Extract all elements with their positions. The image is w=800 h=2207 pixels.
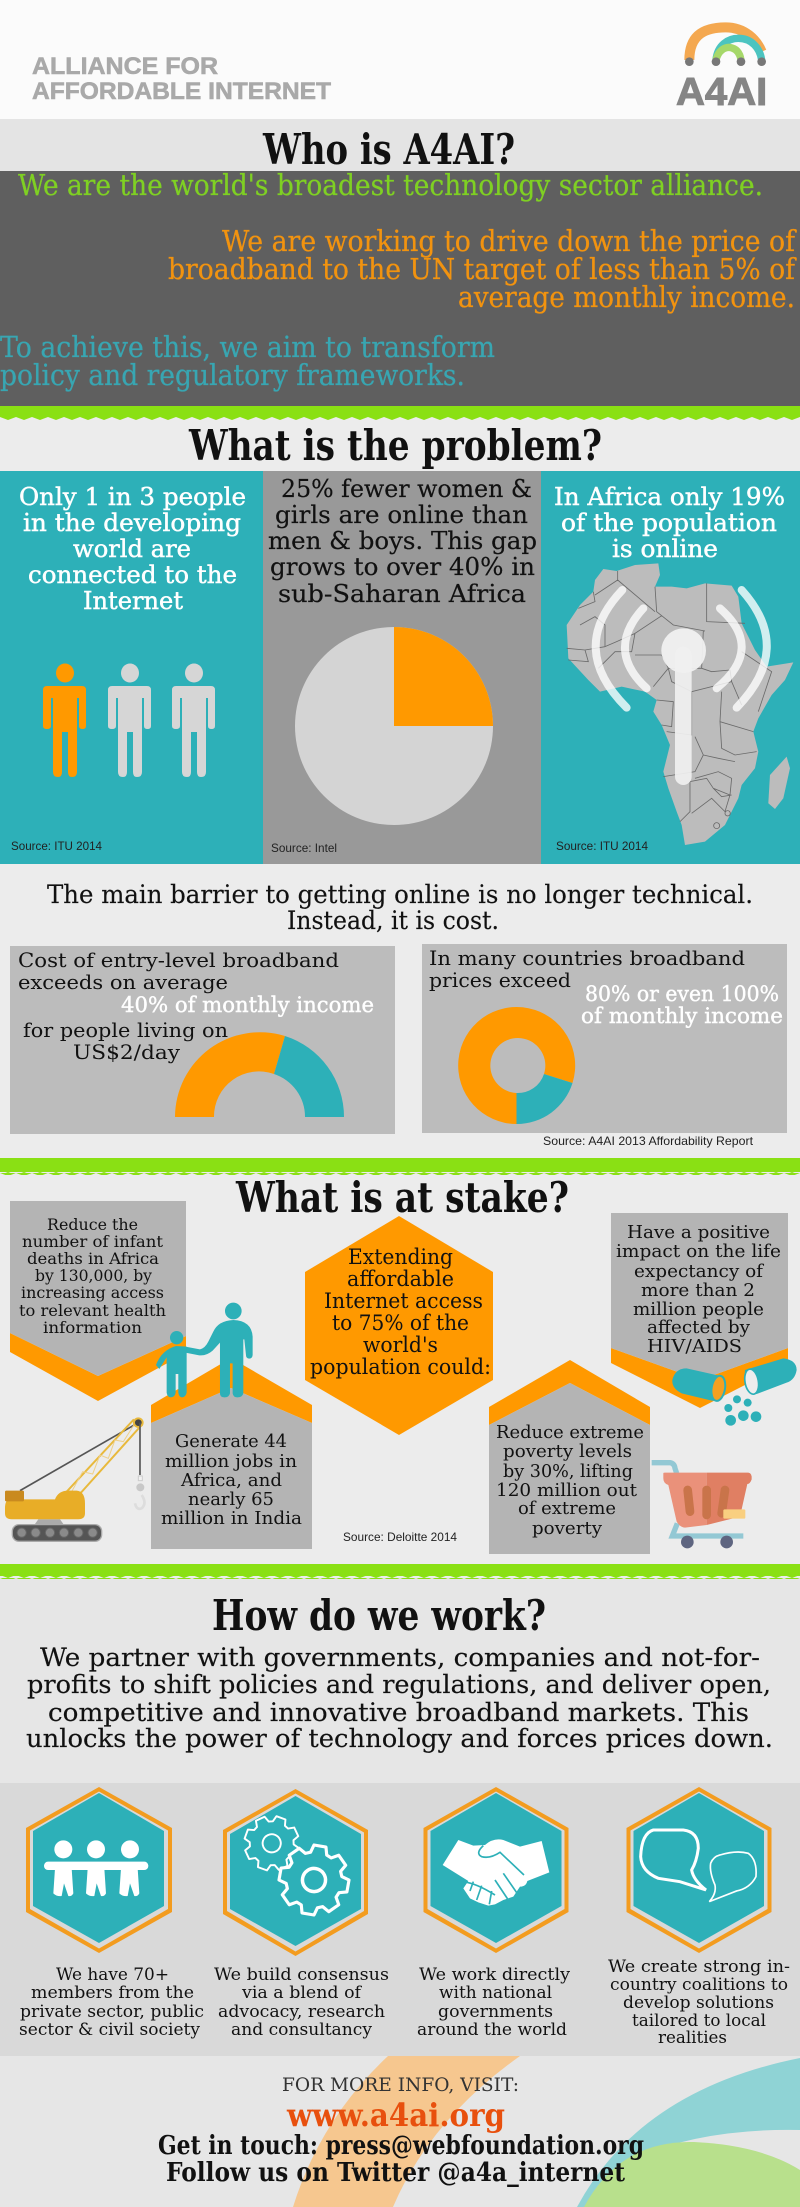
text: coalitions: country coalitions to bbox=[610, 1975, 788, 1995]
source: Source: Intel bbox=[271, 841, 337, 855]
icon: gears bbox=[237, 1809, 354, 1920]
text: members: We have 70+ bbox=[56, 1965, 169, 1985]
hexagon text: Internet access bbox=[324, 1289, 483, 1313]
panel text: connected to the bbox=[28, 561, 237, 589]
contact: Get in touch: press@webfoundation.org bbox=[158, 2131, 644, 2161]
text: governments: with national bbox=[439, 1983, 552, 2003]
text: coalitions: tailored to local bbox=[632, 2011, 766, 2031]
panel text: In many countries broadband bbox=[429, 946, 745, 970]
highlight figure bbox=[581, 982, 783, 1028]
logo bbox=[676, 27, 767, 114]
icon: pill capsule bbox=[672, 1358, 797, 1426]
organisation name: AFFORDABLE INTERNET bbox=[32, 78, 331, 105]
hexagon: governments bbox=[424, 1787, 568, 1953]
callout text: more than 2 bbox=[641, 1280, 755, 1301]
panel: Africa online bbox=[541, 471, 800, 864]
panel text: Internet bbox=[83, 587, 183, 615]
green divider bbox=[0, 1158, 800, 1175]
hexagon text: population could: bbox=[310, 1355, 491, 1379]
section background bbox=[0, 1579, 800, 1783]
callout text: of extreme bbox=[518, 1498, 616, 1519]
callout text: increasing access bbox=[21, 1283, 164, 1302]
text: governments: governments bbox=[438, 2002, 553, 2022]
teal statement: policy and regulatory frameworks. bbox=[0, 358, 465, 392]
callout text: information bbox=[43, 1318, 142, 1337]
text: consensus: We build consensus bbox=[214, 1965, 389, 1985]
organisation name: ALLIANCE FOR bbox=[32, 53, 218, 80]
panel text: sub-Saharan Africa bbox=[278, 580, 526, 608]
heading: Who is A4AI? bbox=[262, 125, 515, 174]
intro paragraph: unlocks the power of technology and forces prices down. bbox=[26, 1724, 773, 1753]
panel text: world are bbox=[73, 535, 191, 563]
callout text bbox=[19, 1215, 166, 1337]
hexagon: consensus bbox=[223, 1789, 368, 1956]
icon: adult and child bbox=[156, 1303, 253, 1397]
panel text bbox=[18, 948, 339, 1064]
hexagon: central statement bbox=[305, 1216, 493, 1435]
panel text: girls are online than bbox=[275, 501, 528, 529]
orange statement bbox=[168, 224, 797, 314]
panel text bbox=[19, 483, 246, 615]
callout text: Reduce extreme bbox=[496, 1422, 644, 1443]
intro paragraph: We partner with governments, companies and not-for- bbox=[40, 1643, 760, 1672]
callout text: by 30%, lifting bbox=[503, 1461, 633, 1482]
footer bbox=[0, 2056, 800, 2207]
callout text: Africa, and bbox=[180, 1470, 282, 1491]
callout text: deaths in Africa bbox=[27, 1249, 159, 1268]
barrier statement: Instead, it is cost. bbox=[287, 906, 499, 935]
icon: orange person bbox=[43, 664, 86, 777]
text: members: sector & civil society bbox=[19, 2020, 200, 2040]
callout: poverty bbox=[489, 1360, 650, 1554]
intro paragraph: profits to shift policies and regulations, and deliver open, bbox=[27, 1670, 771, 1699]
half donut chart bbox=[175, 1032, 344, 1117]
intro paragraph bbox=[26, 1643, 773, 1753]
callout text: to relevant health bbox=[19, 1301, 166, 1320]
panel text: prices exceed bbox=[429, 968, 571, 992]
icon: three people bbox=[44, 1840, 148, 1896]
callout text: affected by bbox=[647, 1317, 751, 1338]
callout text: poverty bbox=[532, 1518, 603, 1539]
callout text: Have a positive bbox=[627, 1222, 770, 1243]
text: governments bbox=[417, 1965, 570, 2040]
panel text: 25% fewer women & bbox=[281, 475, 532, 503]
callout text: impact on the life bbox=[616, 1241, 781, 1262]
callout: infant deaths bbox=[10, 1201, 186, 1401]
callout text: poverty levels bbox=[503, 1441, 632, 1462]
panel text: US$2/day bbox=[73, 1040, 181, 1064]
text: consensus: and consultancy bbox=[231, 2020, 372, 2040]
icon: handshake bbox=[443, 1839, 549, 1906]
callout text: Reduce the bbox=[47, 1215, 138, 1234]
donut chart bbox=[458, 1007, 575, 1124]
text: members: private sector, public bbox=[20, 2002, 204, 2022]
barrier statement: The main barrier to getting online is no longer technical. bbox=[47, 880, 753, 909]
callout text: expectancy of bbox=[634, 1261, 764, 1282]
header bbox=[0, 0, 800, 119]
panel text: for people living on bbox=[23, 1018, 228, 1042]
text: consensus: via a blend of bbox=[241, 1983, 363, 2003]
text: members bbox=[19, 1965, 204, 2040]
dark panel bbox=[0, 171, 800, 406]
text: coalitions: realities bbox=[658, 2028, 727, 2048]
callout text: million people bbox=[633, 1299, 764, 1320]
source: Source: Deloitte 2014 bbox=[343, 1530, 457, 1544]
hexagon text: to 75% of the bbox=[332, 1311, 469, 1335]
teal statement bbox=[0, 330, 495, 392]
highlight figure: 40% of monthly income bbox=[121, 993, 374, 1017]
section: who is A4AI bbox=[0, 119, 800, 406]
panel: cost for people on US$2/day bbox=[10, 946, 395, 1134]
intro paragraph: competitive and innovative broadband markets. This bbox=[48, 1698, 749, 1727]
barrier statement bbox=[47, 880, 753, 935]
panel text: is online bbox=[612, 535, 718, 563]
text: governments: We work directly bbox=[419, 1965, 570, 1985]
icon: speech bubbles bbox=[641, 1830, 756, 1902]
callout text bbox=[161, 1431, 302, 1529]
highlight figure: 80% or even 100% bbox=[585, 982, 779, 1006]
hexagon text: affordable bbox=[347, 1267, 454, 1291]
icon: grey person bbox=[108, 664, 151, 777]
heading: how do we work: How do we work? bbox=[212, 1591, 546, 1640]
callout: jobs bbox=[151, 1358, 312, 1549]
heading: what is the problem: What is the problem? bbox=[188, 421, 602, 470]
hexagon text: Extending bbox=[348, 1245, 453, 1269]
organisation name bbox=[32, 53, 331, 105]
icon: signal tower bbox=[596, 590, 767, 777]
panel: gender gap bbox=[263, 471, 541, 864]
text: governments: around the world bbox=[417, 2020, 567, 2040]
text: coalitions: We create strong in- bbox=[608, 1957, 790, 1977]
panel text: of the population bbox=[561, 509, 777, 537]
icon: grey person bbox=[172, 664, 215, 777]
callout text bbox=[496, 1422, 644, 1539]
callout text: million in India bbox=[161, 1508, 302, 1529]
text: coalitions bbox=[608, 1957, 790, 2048]
panel: connected people bbox=[0, 471, 263, 864]
teal statement: To achieve this, we aim to transform bbox=[0, 330, 495, 364]
panel text bbox=[429, 946, 745, 992]
hexagon: members bbox=[26, 1787, 172, 1953]
source: Source: ITU 2014 bbox=[11, 839, 102, 853]
callout text: HIV/AIDS bbox=[647, 1336, 742, 1357]
panel text: Only 1 in 3 people bbox=[19, 483, 246, 511]
icon: Africa map bbox=[567, 563, 793, 845]
source: Source: A4AI 2013 Affordability Report bbox=[543, 1134, 754, 1148]
text: coalitions: develop solutions bbox=[623, 1993, 774, 2013]
panel text: men & boys. This gap bbox=[268, 527, 537, 555]
hexagon text bbox=[310, 1245, 491, 1379]
callout text: nearly 65 bbox=[188, 1489, 274, 1510]
panel text: In Africa only 19% bbox=[554, 483, 785, 511]
website: www.a4ai.org bbox=[286, 2096, 505, 2134]
panel text bbox=[554, 483, 785, 563]
callout text: million jobs in bbox=[165, 1451, 297, 1472]
text: consensus: advocacy, research bbox=[218, 2002, 385, 2022]
logo: A4AI bbox=[676, 71, 767, 114]
decorative logo arcs bbox=[293, 2056, 800, 2207]
green divider bbox=[0, 406, 800, 420]
source: Source: ITU 2014 bbox=[556, 839, 648, 853]
icon: shopping cart bbox=[652, 1463, 752, 1548]
pie chart bbox=[295, 627, 493, 825]
panel: prices in many countries bbox=[422, 944, 787, 1133]
callout: life expectancy bbox=[611, 1213, 788, 1408]
hexagon: coalitions bbox=[626, 1787, 772, 1953]
callout text: by 130,000, by bbox=[35, 1266, 152, 1285]
panel text bbox=[268, 475, 537, 608]
callout text: Generate 44 bbox=[175, 1431, 287, 1452]
heading: what is at stake: What is at stake? bbox=[235, 1173, 569, 1222]
panel text: exceeds on average bbox=[18, 970, 228, 994]
callout text bbox=[616, 1222, 781, 1357]
text: consensus bbox=[214, 1965, 389, 2040]
band background bbox=[0, 1783, 800, 2056]
panel text: grows to over 40% in bbox=[270, 553, 535, 581]
footer prompt: FOR MORE INFO, VISIT: bbox=[282, 2074, 519, 2096]
twitter: Follow us on Twitter @a4a_internet bbox=[166, 2158, 625, 2188]
callout text: 120 million out bbox=[496, 1480, 638, 1501]
panel text: Cost of entry-level broadband bbox=[18, 948, 339, 972]
panel text: in the developing bbox=[23, 509, 241, 537]
text: members: members from the bbox=[31, 1983, 194, 2003]
highlight figure: of monthly income bbox=[581, 1004, 783, 1028]
callout text: number of infant bbox=[22, 1232, 164, 1251]
green divider bbox=[0, 1564, 800, 1579]
hexagon text: world's bbox=[363, 1333, 438, 1357]
icon: crane bbox=[5, 1417, 144, 1541]
